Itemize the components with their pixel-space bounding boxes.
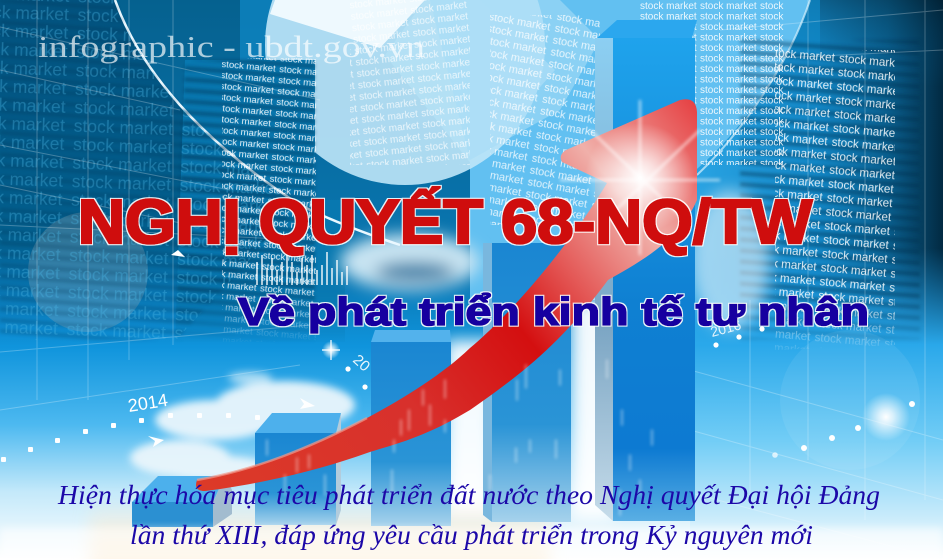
arrow body <box>196 99 697 491</box>
caption <box>57 480 880 550</box>
white arc right <box>697 0 810 175</box>
bar 2 <box>255 413 341 525</box>
upper light strip <box>430 0 600 160</box>
white bottom wash <box>0 528 943 559</box>
white glow between bars <box>445 190 770 520</box>
stock market text: upper pale <box>350 0 470 165</box>
dark streaks: right <box>740 40 920 340</box>
glow: lens right <box>780 330 920 470</box>
title: NGHỊ QUYẾT 68-NQ/TW <box>78 188 812 257</box>
waveform <box>257 250 347 285</box>
panel: right-center light block <box>470 0 810 300</box>
year label 2014: 2014 <box>126 390 169 416</box>
pale wedge lower right <box>385 0 555 165</box>
stock market text: middle <box>490 15 600 225</box>
stock market text: center block <box>222 58 316 342</box>
arrow head glint <box>585 123 695 233</box>
bar 5 <box>595 20 697 521</box>
arrow marker <box>171 250 185 257</box>
dotted line left <box>1 413 260 462</box>
cloud haze behind title <box>340 234 480 290</box>
panel: lower right sky <box>690 345 943 559</box>
panel: top blue <box>240 0 820 60</box>
stock market text: dark left <box>0 0 300 340</box>
year label 2016: 2016 <box>709 316 743 340</box>
panel: dark right sweep <box>690 0 943 345</box>
caption: Hiện thực hóa mục tiêu phát triển đất nước theo Nghị quyết Đại hội Đảng <box>57 480 880 510</box>
sparkle streaks <box>267 360 652 515</box>
year label partial: 20 <box>349 351 373 375</box>
bar 3 <box>371 330 451 526</box>
arrow marker <box>148 436 164 447</box>
bar 4 <box>483 243 571 522</box>
cream floor glow <box>90 500 550 559</box>
star sparkle <box>322 340 340 360</box>
glow: head star <box>560 100 720 255</box>
pie chart wedge <box>270 0 425 48</box>
stock market text: upper center <box>640 0 786 165</box>
arrow marker <box>300 398 315 409</box>
arrow highlight <box>197 418 367 480</box>
caption: lần thứ XIII, đáp ứng yêu cầu phát triển trong Kỷ nguyên mới <box>130 520 813 550</box>
bar chart <box>132 20 697 527</box>
clouds <box>130 372 355 480</box>
stock market text: right panel <box>775 50 895 350</box>
dark streaks: left <box>0 0 300 340</box>
dark streaks: center <box>175 60 315 342</box>
white arc left <box>115 0 400 245</box>
pie chart circle <box>265 0 545 185</box>
arrow <box>196 99 697 491</box>
panel: center blue block <box>175 60 345 342</box>
bar 1 <box>132 476 232 527</box>
panel: right fade <box>690 0 943 345</box>
subtitle: Về phát triển kinh tế tư nhân <box>238 291 869 334</box>
dotted line right <box>345 326 915 458</box>
panel: dark left sweep <box>0 0 300 345</box>
watermark: infographic - ubdt.gov.vn <box>38 29 426 64</box>
small pie circle <box>28 212 148 332</box>
